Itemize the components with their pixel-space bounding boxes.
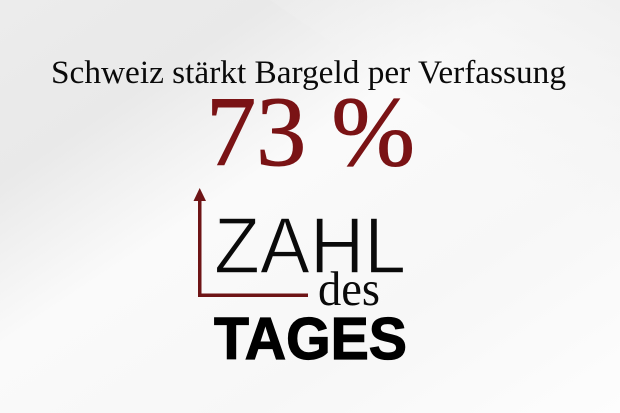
logo word: des: des: [318, 261, 380, 316]
logo word: ZAHL: ZAHL: [214, 201, 406, 290]
big number: 73 %: 73 %: [206, 76, 415, 187]
logo word: TAGES: TAGES: [214, 306, 407, 372]
icon: growth arrow: [194, 188, 308, 297]
title: Schweiz stärkt Bargeld per Verfassung: [51, 55, 566, 91]
